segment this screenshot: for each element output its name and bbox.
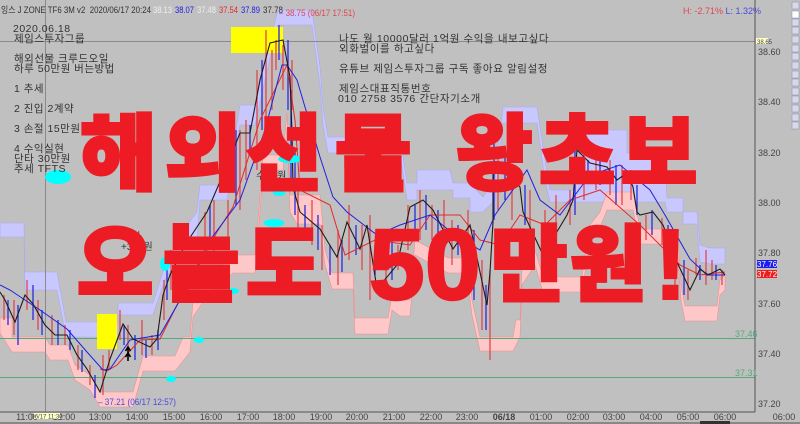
- time axis: 06:00: [773, 412, 795, 422]
- low label: – 37.21 (06/17 12:57): [98, 397, 176, 407]
- time axis: 18:00: [273, 412, 295, 422]
- price axis: 37.46: [735, 329, 758, 339]
- price axis: 37.31: [735, 368, 758, 378]
- time axis: 05:00: [677, 412, 699, 422]
- time axis: 15:00: [163, 412, 185, 422]
- text block: left notes: 단타 30만원: [14, 153, 71, 165]
- price axis: 37.76: [757, 260, 778, 269]
- price axis: 38.40: [758, 97, 781, 107]
- chart header: 37.54: [219, 5, 238, 15]
- time axis: 12:00: [53, 412, 75, 422]
- text block: chart note: +3 원: [121, 241, 153, 253]
- cyan markers: [45, 155, 302, 382]
- text block: chart note: 수 만원: [256, 170, 286, 182]
- title line 1: 해외선물왕초보: [80, 87, 697, 207]
- price axis: 37.60: [758, 299, 781, 309]
- price axis: 38.20: [758, 148, 781, 158]
- range label: H: -2.71% L: 1.32%: [683, 6, 761, 16]
- price axis: 37.72: [757, 270, 778, 279]
- support lines: [0, 338, 755, 378]
- chart header: [1, 4, 283, 15]
- time axis: 19:00: [310, 412, 332, 422]
- time axis: [0, 412, 795, 422]
- text block: right notes: 유튜브 제임스투자그룹 구독 좋아요 알림설정: [339, 62, 548, 75]
- time axis: 20:00: [346, 412, 368, 422]
- time axis: 21:00: [383, 412, 405, 422]
- time axis: 16:00: [200, 412, 222, 422]
- time axis: 23:00: [456, 412, 478, 422]
- arrow markers: [126, 347, 130, 361]
- text block: chart note: 스익: [122, 231, 140, 243]
- text block: left notes: 추세 TFTS: [14, 163, 66, 175]
- price axis: 38.60: [758, 47, 781, 57]
- chart header: 38.13: [153, 5, 172, 15]
- chart header: 잉스 J ZONE TF6 3M v2 2020/06/17 20:24: [1, 4, 151, 15]
- text block: left notes: 2 진입 2계약: [14, 102, 74, 115]
- time axis: 11:00: [16, 412, 38, 422]
- candle wicks: red: [4, 30, 722, 395]
- time axis: 06/18: [493, 412, 515, 422]
- title line 2 unit: 만원: [491, 198, 646, 318]
- time axis: 04:00: [640, 412, 662, 422]
- text block: left notes: 2020.06.18: [13, 23, 71, 35]
- text block: left notes: 하루 50만원 버는방법: [14, 62, 115, 75]
- price axis: 38.00: [758, 198, 781, 208]
- highlight: yellow boxes: [97, 27, 283, 349]
- price axis: 37.20: [758, 399, 781, 409]
- time axis: 17:00: [237, 412, 259, 422]
- text block: right notes: 제임스대표직통번호: [339, 82, 431, 95]
- time axis: 02:00: [567, 412, 589, 422]
- price axis: 38.65: [757, 40, 773, 46]
- title line 2 amount: 50: [369, 209, 481, 321]
- text block: left notes: 3 손절 15만원: [14, 122, 80, 135]
- time axis: 06/17 11:30: [31, 414, 63, 420]
- time axis: 13:00: [89, 412, 111, 422]
- text block: left notes: 4 수익실현: [14, 143, 64, 155]
- title line 2 exclamation: !: [654, 209, 687, 321]
- text block: right notes: [338, 33, 549, 105]
- price axis: [735, 0, 781, 412]
- text block: chart note: [121, 170, 286, 253]
- text block: left notes: 제임스투자그룹: [14, 32, 85, 45]
- time axis: 06:00: [714, 412, 736, 422]
- chart header: 37.78: [263, 5, 283, 15]
- time axis: 03:00: [603, 412, 625, 422]
- high label: – 38.75 (06/17 17:51): [279, 8, 355, 18]
- text block: right notes: 나도 월 10000달러 1억원 수익을 내보고싶다: [339, 33, 549, 45]
- candle wicks: blue: [8, 25, 716, 398]
- black price line: [0, 40, 725, 392]
- status strip: [0, 421, 800, 424]
- text block: left notes: [13, 23, 115, 175]
- toolbar icons: [792, 2, 799, 129]
- time axis: 22:00: [420, 412, 442, 422]
- text block: left notes: 1 추세: [14, 83, 44, 95]
- chart header: 37.48: [197, 5, 216, 15]
- lower band cloud: [0, 113, 725, 407]
- time axis: 01:00: [530, 412, 552, 422]
- chart header: 37.89: [241, 5, 260, 15]
- moving average: blue line: [0, 65, 725, 370]
- moving average: red line: [100, 65, 725, 371]
- time axis: 14:00: [126, 412, 148, 422]
- price axis: 37.80: [758, 248, 781, 258]
- chart header: 38.07: [175, 5, 194, 15]
- text block: right notes: 외화벌이를 하고싶다: [339, 42, 435, 55]
- title line 2: 오늘도: [77, 198, 322, 318]
- upper band cloud: [0, 10, 725, 337]
- text block: left notes: 해외선물 크루드오일: [14, 52, 109, 65]
- text block: right notes: 010 2758 3576 간단자기소개: [338, 93, 481, 105]
- price axis: 37.40: [758, 349, 781, 359]
